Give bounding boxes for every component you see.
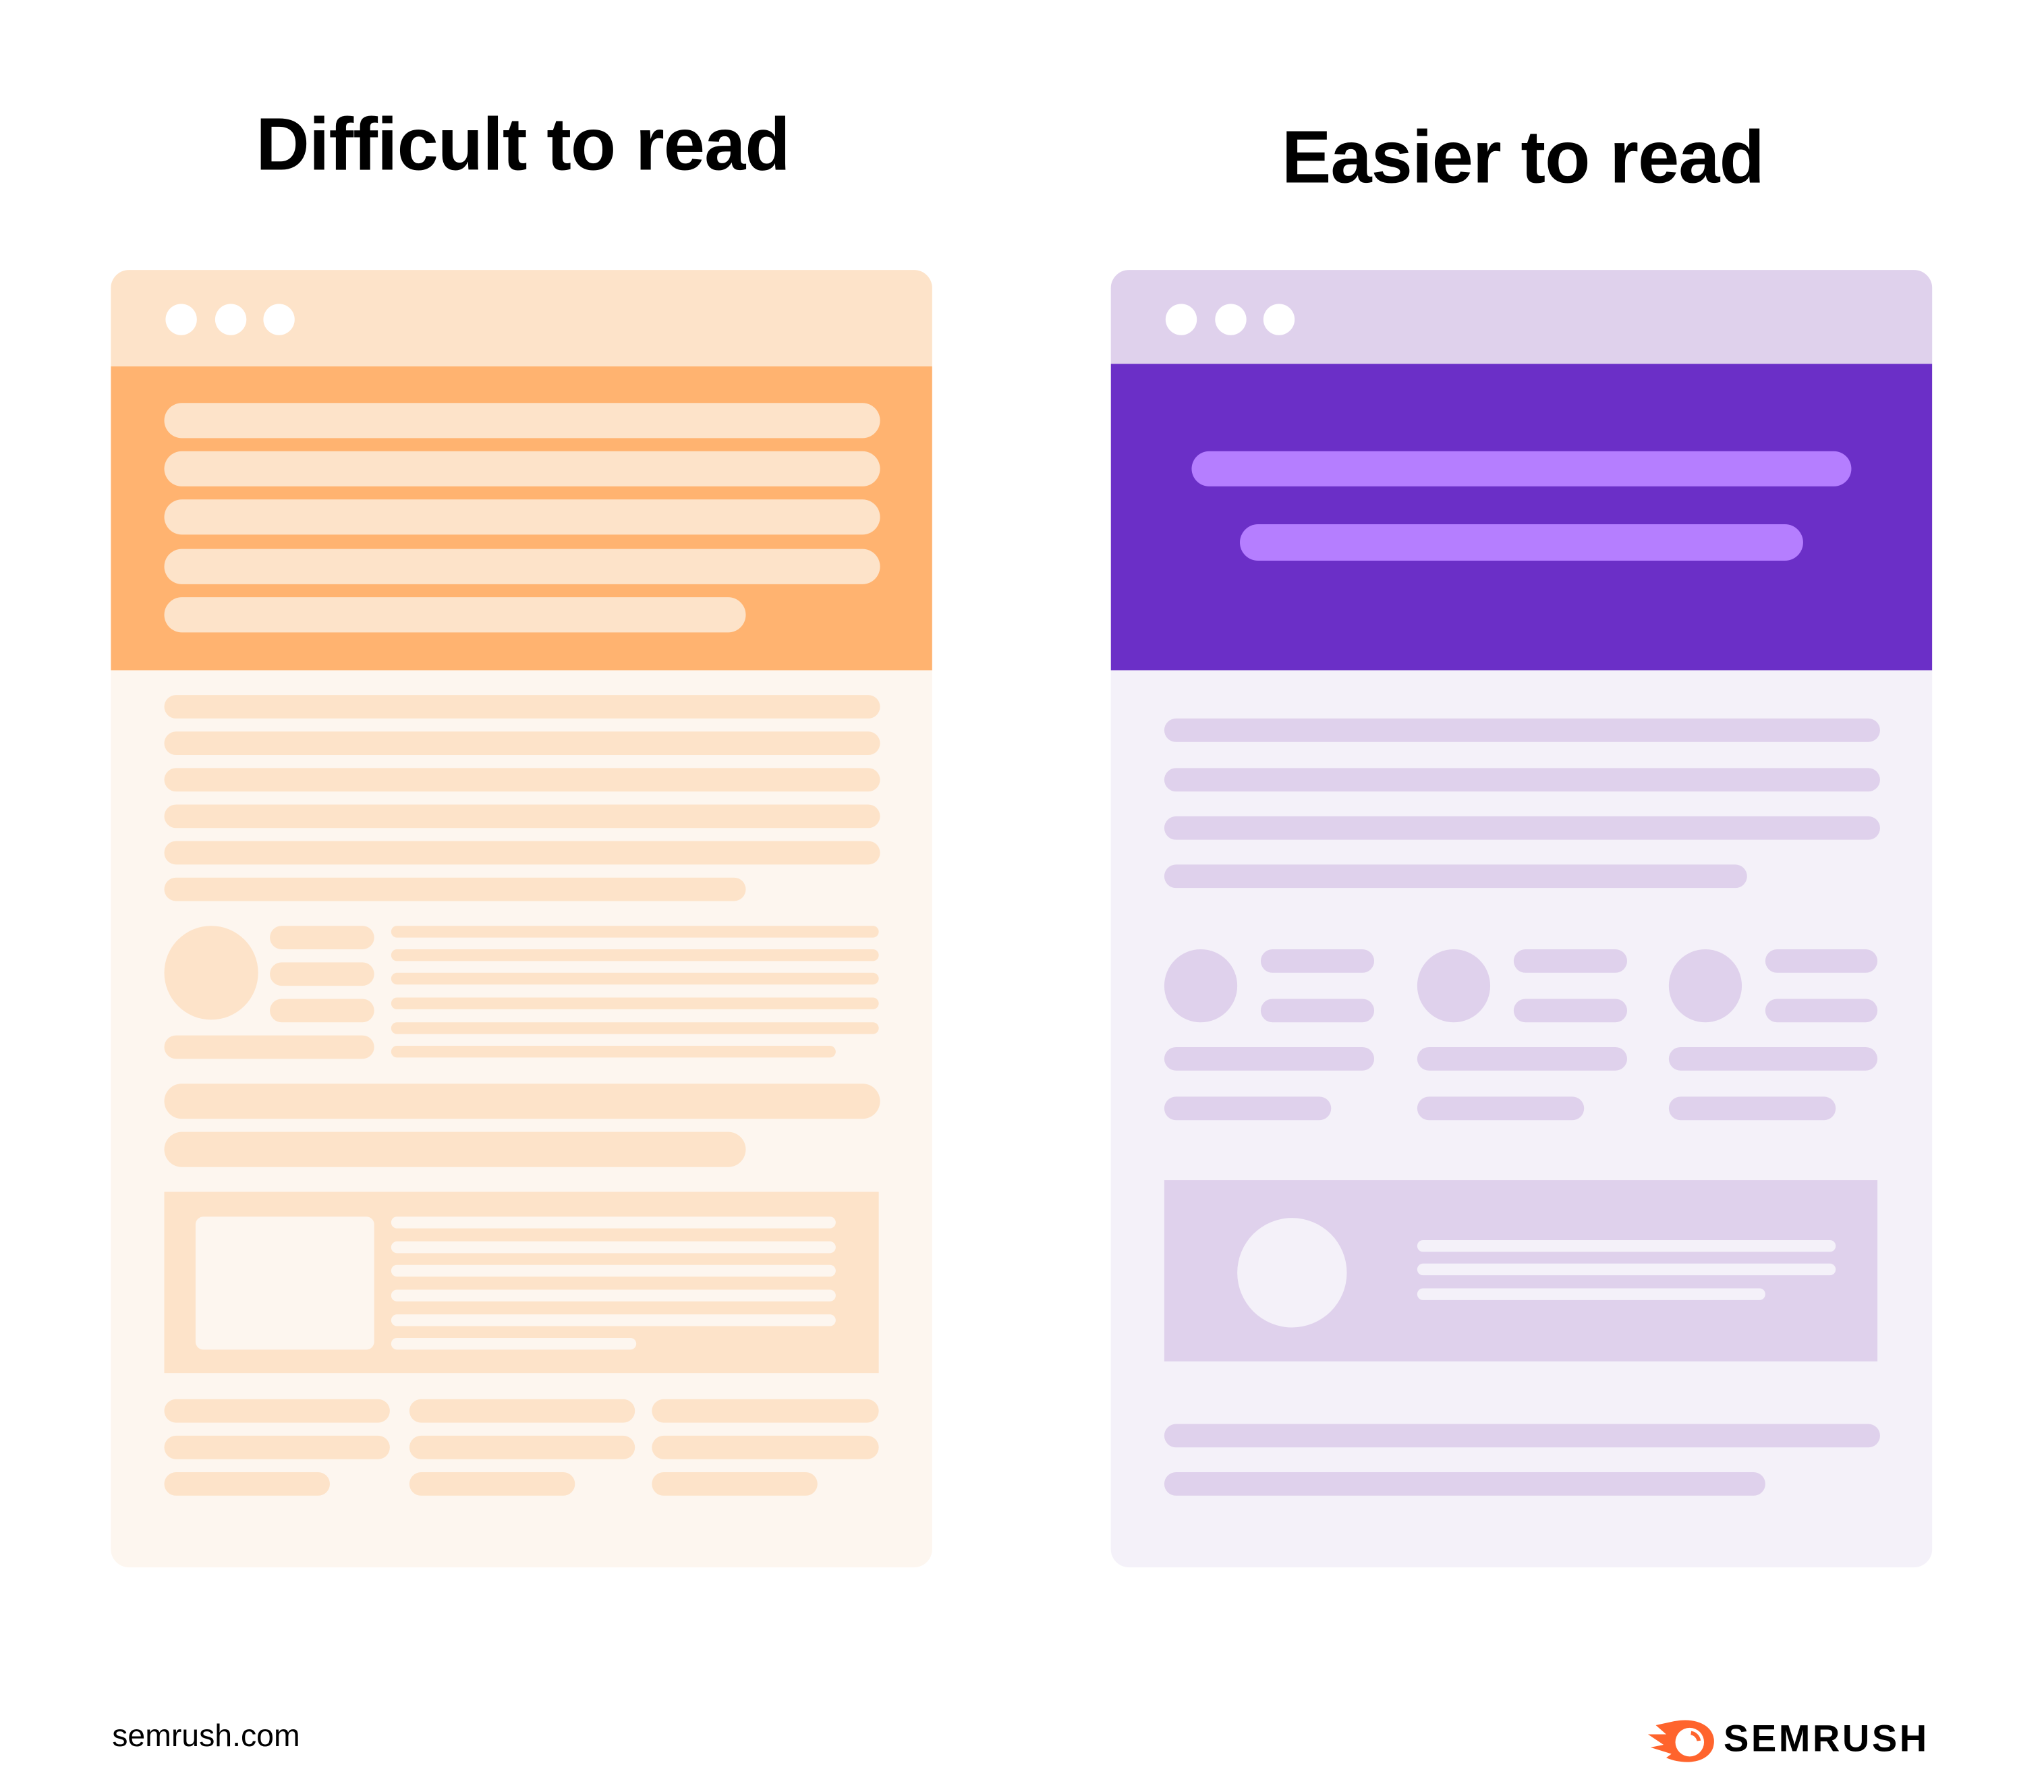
browser header: [1111, 270, 1932, 364]
title: difficult: Difficult to read: [256, 103, 790, 186]
body content: [1164, 719, 1880, 1496]
title: easier: Easier to read: [1282, 116, 1764, 200]
logo: semrush: SEMRUSH: [1724, 1718, 1929, 1760]
footer: source url: semrush.com: [112, 1718, 300, 1754]
hero block: [1111, 364, 1932, 670]
browser header: [111, 270, 932, 366]
logo: semrush: [1648, 1718, 1929, 1762]
body text lines: [165, 695, 880, 1496]
panel: easier page mockup: [1111, 270, 1932, 1567]
panel: difficult page mockup: [111, 270, 932, 1567]
hero block: [111, 366, 932, 670]
icon: semrush fireball: [1648, 1720, 1714, 1762]
